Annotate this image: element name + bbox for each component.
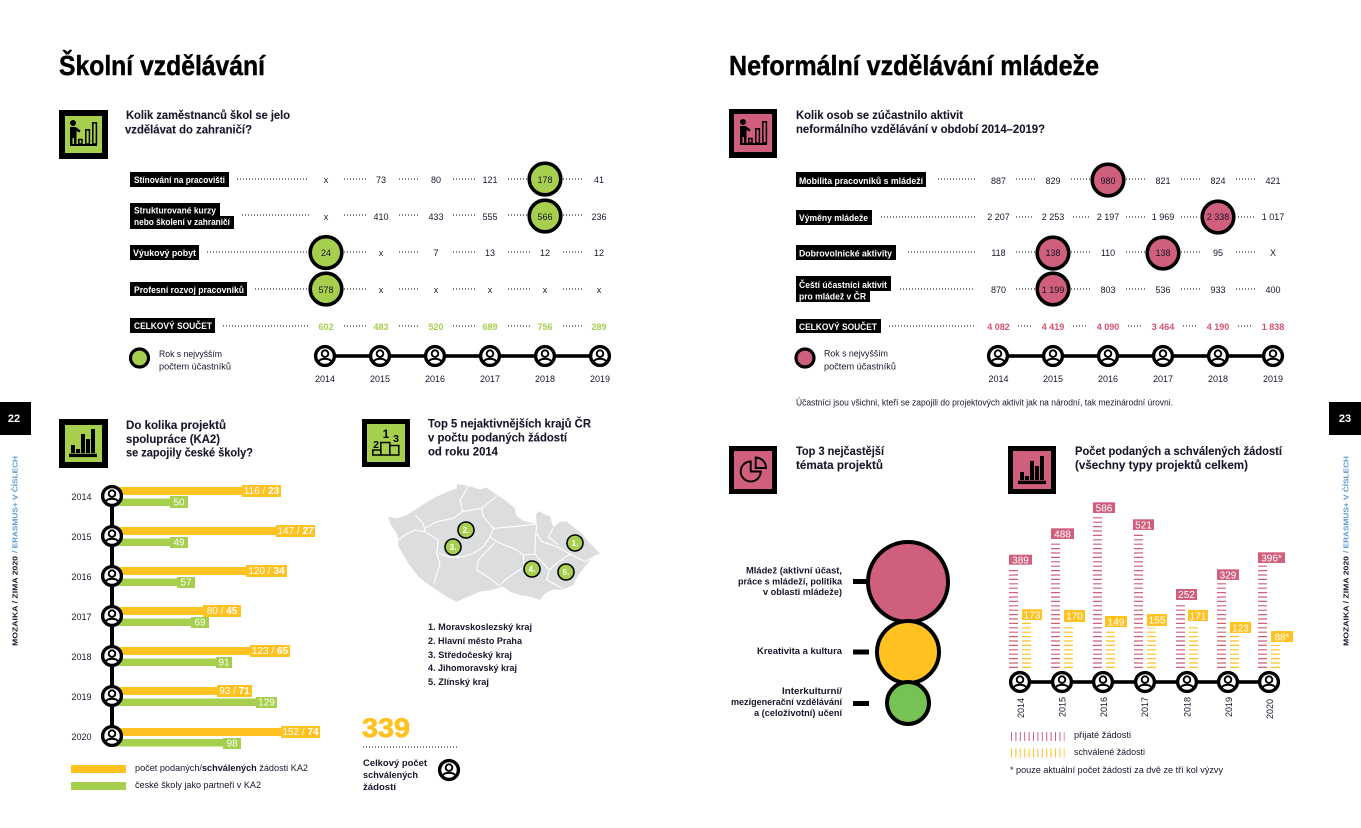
table values <box>987 176 1284 295</box>
yellow value tags: 88* <box>1274 632 1290 644</box>
row labels: nebo školení v zahraničí <box>134 217 230 227</box>
bar value labels: 123 / 65 <box>252 646 289 657</box>
map of Czech regions <box>388 484 600 602</box>
timeline 2014-2019: 2018 <box>535 374 555 384</box>
page number tab 23 <box>1329 402 1361 435</box>
legend: highest year: Rok s nejvyšším <box>824 348 888 358</box>
row labels: Výměny mládeže <box>799 213 868 223</box>
table values: 236 <box>591 212 607 222</box>
totals pink: 3 464 <box>1152 322 1174 332</box>
year labels: 2019 <box>71 692 92 702</box>
table values: 73 <box>376 175 386 185</box>
yellow value tags: 173 <box>1024 610 1041 622</box>
heading: KA2 question: spolupráce (KA2) <box>126 432 220 446</box>
table values <box>318 175 607 295</box>
map marker numbers <box>450 526 578 577</box>
table values: X <box>1270 248 1276 258</box>
table values: 110 <box>1101 248 1115 258</box>
table values: 121 <box>482 175 498 185</box>
map marker numbers: 4. <box>529 565 535 574</box>
table values: x <box>434 285 439 295</box>
bars <box>112 485 320 749</box>
timeline 2014-2019: 2014 <box>988 374 1009 384</box>
year labels: 2016 <box>71 572 92 582</box>
timeline 2014-2019: 2019 <box>1263 374 1283 384</box>
row labels: Stínování na pracovišti <box>134 175 225 185</box>
topic labels: Interkulturní/ <box>782 686 843 696</box>
table values: 421 <box>1265 176 1281 186</box>
region list: 1. Moravskoslezský kraj <box>428 622 532 632</box>
totals green <box>318 322 607 332</box>
table values: 887 <box>991 176 1006 186</box>
table values: 80 <box>431 175 441 185</box>
table values: 536 <box>1155 285 1171 295</box>
rotated year labels <box>1016 697 1275 719</box>
table values: 2 253 <box>1042 212 1064 222</box>
page number tab 22 <box>0 402 31 435</box>
vertical timeline with icons <box>103 487 121 745</box>
heading: KA2 question <box>126 418 253 460</box>
table values: 410 <box>373 212 389 222</box>
highlight circles <box>310 163 561 305</box>
row labels: CELKOVÝ SOUČET <box>134 320 212 331</box>
icon: bar chart pink <box>1008 446 1056 494</box>
pink value tags: 252 <box>1178 590 1195 601</box>
legend submitted / approved: schválené žádosti <box>1074 747 1145 757</box>
panel: KA2 projects <box>59 418 320 790</box>
icon: podium green: 2 <box>373 439 379 451</box>
panel: school staff table <box>59 108 610 384</box>
row labels: CELKOVÝ SOUČET <box>799 321 877 332</box>
stat 339 <box>362 713 459 792</box>
table values: 1 017 <box>1262 212 1284 222</box>
rotated year labels: 2016 <box>1099 697 1109 717</box>
table values: 803 <box>1100 285 1116 295</box>
table values: 13 <box>485 248 495 258</box>
rotated year labels: 2019 <box>1224 697 1234 717</box>
row labels: Strukturované kurzy <box>134 206 216 216</box>
heading: KA2 question: se zapojily české školy? <box>126 446 253 460</box>
icon: podium green <box>362 419 410 467</box>
heading: top 5: od roku 2014 <box>428 444 498 458</box>
yellow value tags: 149 <box>1108 618 1125 628</box>
bar value labels: 129 <box>258 698 275 708</box>
topic labels: práce s mládeží, politika <box>738 576 843 586</box>
icon: bar chart green <box>59 419 108 468</box>
table values: 578 <box>318 285 334 295</box>
map marker numbers: 1. <box>572 539 578 548</box>
row labels <box>796 172 926 333</box>
totals pink: 4 082 <box>987 322 1010 332</box>
table values: 824 <box>1210 176 1226 186</box>
map marker numbers: 5. <box>563 568 569 577</box>
totals pink: 4 419 <box>1042 322 1064 332</box>
panel: top 3 topics <box>729 444 948 724</box>
year labels: 2014 <box>71 492 92 502</box>
timeline 2014-2019: 2017 <box>1153 374 1173 384</box>
table values: x <box>324 212 329 222</box>
yellow value tags: 123 <box>1232 624 1249 634</box>
row labels: Mobilita pracovníků s mládeží <box>799 176 923 186</box>
year labels <box>71 492 92 742</box>
heading: staff question <box>125 108 290 136</box>
legend KA2: počet podaných/schválených žádosti KA2 <box>135 763 308 773</box>
table values: x <box>543 285 548 295</box>
table values: 870 <box>991 285 1006 295</box>
timeline 2014-2019: 2015 <box>370 374 390 384</box>
pink value tags: 396* <box>1261 554 1282 564</box>
year labels: 2020 <box>71 732 92 742</box>
heading: participants question: Kolik osob se zúčastnilo aktivit <box>796 108 963 122</box>
table values: 24 <box>321 248 331 258</box>
table values: 433 <box>428 212 444 222</box>
timeline 2014-2019: 2015 <box>1043 374 1063 384</box>
vertical running head left <box>10 456 20 646</box>
totals pink: 4 190 <box>1207 322 1229 332</box>
table values: 138 <box>1045 248 1061 258</box>
table values: x <box>597 285 602 295</box>
timeline 2014-2019: 2019 <box>590 374 610 384</box>
stat 339: schválených <box>363 770 418 780</box>
region list: 4. Jihomoravský kraj <box>428 663 517 673</box>
striped bars submitted <box>1014 516 1262 668</box>
table values: 933 <box>1210 285 1226 295</box>
bar value labels: 69 <box>194 618 206 628</box>
legend KA2 <box>71 763 308 790</box>
rotated year labels: 2020 <box>1265 699 1275 719</box>
vertical running head right: MOZAIKA / ZIMA 2020 <box>1344 556 1350 646</box>
table values: 1 199 <box>1042 285 1064 295</box>
year labels: 2015 <box>71 532 92 542</box>
legend: highest year: počtem účastníků <box>824 362 896 372</box>
totals green: 602 <box>318 322 334 332</box>
footnote: * pouze aktuální počet žádostí za dvě ze tří kol výzvy <box>1010 765 1224 775</box>
table values: x <box>324 175 329 185</box>
legend: highest year: Rok s nejvyšším <box>159 349 222 359</box>
icon: person with bars pink <box>729 109 777 158</box>
table values: 41 <box>594 175 604 185</box>
yellow value tags <box>1022 609 1293 644</box>
bar value labels: 120 / 34 <box>248 566 285 577</box>
bar value labels: 116 / 23 <box>244 486 280 497</box>
table values: 12 <box>594 248 604 258</box>
legend: highest year <box>130 349 231 372</box>
yellow value tags: 155 <box>1149 616 1166 626</box>
rotated year labels: 2014 <box>1016 698 1026 718</box>
table values: 7 <box>433 248 439 258</box>
row labels: Dobrovolnické aktivity <box>799 248 892 258</box>
table values: 2 197 <box>1097 212 1119 222</box>
heading: KA2 question: Do kolika projektů <box>126 418 226 432</box>
page title: school education: Školní vzdělávání <box>59 49 266 81</box>
year labels: 2018 <box>71 652 92 662</box>
table values: 821 <box>1155 176 1171 186</box>
row labels: Výukový pobyt <box>133 248 196 258</box>
topic labels: mezigenerační vzdělávání <box>731 697 842 707</box>
timeline 2014-2019 <box>988 347 1283 384</box>
bar value labels: 91 <box>218 658 230 668</box>
note under table: Účastníci jsou všichni, kteří se zapojili do projektových aktivit jak na národní, tak mezinárodní úrovni. <box>796 398 1173 408</box>
connector lines <box>853 579 869 706</box>
row labels: pro mládež v ČR <box>799 290 866 302</box>
topic labels: a (celoživotní) učení <box>754 708 843 718</box>
topic labels: Kreativita a kultura <box>757 646 843 656</box>
table values: 1 969 <box>1152 212 1174 222</box>
panel: participants table <box>729 108 1284 408</box>
year labels: 2017 <box>71 612 92 622</box>
legend: highest year <box>796 348 896 372</box>
legend submitted / approved <box>1011 730 1145 757</box>
stat 339: žádostí <box>363 782 397 792</box>
totals green: 689 <box>482 322 498 332</box>
bar value labels <box>173 486 319 750</box>
page number tab 23: 23 <box>1339 413 1351 425</box>
pink value tags: 521 <box>1135 520 1152 532</box>
table values: x <box>488 285 493 295</box>
topic labels: Mládež (aktivní účast, <box>746 566 842 576</box>
horizontal timeline with icons <box>1011 673 1278 691</box>
bar value labels: 152 / 74 <box>282 727 319 738</box>
bar value labels: 57 <box>180 578 192 588</box>
heading: top 3: Top 3 nejčastější <box>796 444 885 458</box>
timeline 2014-2019: 2017 <box>480 374 500 384</box>
timeline 2014-2019: 2014 <box>315 374 335 384</box>
timeline 2014-2019: 2016 <box>425 374 445 384</box>
table values: 980 <box>1100 176 1116 186</box>
region list: 2. Hlavní město Praha <box>428 636 523 646</box>
bar value labels: 49 <box>173 538 185 548</box>
legend KA2: české školy jako partneři v KA2 <box>135 780 261 790</box>
rotated year labels: 2017 <box>1140 697 1150 717</box>
icon: podium green: 3 <box>393 433 399 445</box>
table values: 12 <box>540 248 550 258</box>
vertical running head right: / ERASMUS+ V ČÍSLECH <box>1342 456 1350 553</box>
timeline 2014-2019: 2018 <box>1208 374 1228 384</box>
row labels <box>130 172 247 333</box>
table values: 118 <box>991 248 1006 258</box>
legend: highest year: počtem účastníků <box>159 362 231 372</box>
yellow value tags: 170 <box>1066 612 1083 622</box>
page title: non-formal youth education: Neformální vzdělávání mládeže <box>729 50 1099 81</box>
table values: 555 <box>482 212 498 222</box>
map marker numbers: 2. <box>463 526 469 535</box>
table values: 2 338 <box>1207 212 1229 222</box>
heading: participants question <box>796 108 1045 136</box>
striped bars approved <box>1026 623 1276 668</box>
highlight circles <box>1037 164 1234 305</box>
heading: staff question: vzdělávat do zahraničí? <box>125 122 252 136</box>
totals pink <box>987 322 1284 332</box>
heading: applications <box>1075 444 1283 472</box>
table values: 829 <box>1045 176 1061 186</box>
bar value labels: 98 <box>226 738 238 750</box>
bar value labels: 147 / 27 <box>277 526 314 537</box>
heading: applications: Počet podaných a schválených žádostí <box>1075 444 1283 458</box>
heading: applications: (všechny typy projektů celkem) <box>1075 458 1248 472</box>
stat 339: Celkový počet <box>363 758 427 768</box>
topic labels: v oblasti mládeže) <box>763 587 842 597</box>
region list: 5. Zlínský kraj <box>428 677 489 687</box>
heading: top 3: témata projektů <box>796 458 883 472</box>
table values: 95 <box>1213 248 1223 258</box>
rotated year labels: 2015 <box>1058 697 1068 717</box>
table values: 178 <box>537 175 553 185</box>
vertical running head right <box>1342 456 1350 646</box>
heading: top 3 <box>796 444 885 472</box>
pink value tags: 389 <box>1012 556 1029 566</box>
heading: top 5: v počtu podaných žádostí <box>428 430 568 444</box>
vertical running head left: MOZAIKA / ZIMA 2020 <box>12 556 20 646</box>
timeline 2014-2019 <box>315 347 610 384</box>
stat 339: 339 <box>362 713 410 743</box>
pink value tags <box>1009 502 1285 601</box>
table values: 138 <box>1155 248 1171 258</box>
row labels: Profesní rozvoj pracovníků <box>134 285 244 295</box>
region list <box>428 622 532 687</box>
map marker numbers: 3. <box>450 543 456 552</box>
table values: x <box>379 248 384 258</box>
topic labels <box>731 566 843 718</box>
bar value labels: 93 / 71 <box>219 686 250 697</box>
map markers <box>445 522 583 580</box>
heading: top 5: Top 5 nejaktivnějších krajů ČR <box>428 416 591 430</box>
region list: 3. Středočeský kraj <box>428 650 512 660</box>
totals pink: 4 090 <box>1097 322 1119 332</box>
table values: 400 <box>1265 285 1281 295</box>
icon: podium green: 1 <box>383 429 390 441</box>
table values: x <box>379 285 384 295</box>
pink value tags: 586 <box>1096 504 1113 514</box>
bar value labels: 50 <box>173 498 185 508</box>
table values: 2 207 <box>987 212 1010 222</box>
totals green: 520 <box>428 322 444 332</box>
icon: person with bars green <box>59 110 108 159</box>
rotated year labels: 2018 <box>1182 697 1192 717</box>
bar value labels: 80 / 45 <box>207 606 238 617</box>
totals pink: 1 838 <box>1262 322 1284 332</box>
icon: pie chart pink <box>729 446 777 494</box>
timeline 2014-2019: 2016 <box>1098 374 1118 384</box>
totals green: 756 <box>537 322 553 332</box>
legend submitted / approved: přijaté žádosti <box>1074 730 1131 740</box>
heading: participants question: neformálního vzdělávání v období 2014–2019? <box>796 122 1045 136</box>
heading: top 5 <box>428 416 591 458</box>
totals green: 483 <box>373 322 389 332</box>
panel: top 5 regions <box>362 416 600 792</box>
panel: applications chart <box>1008 444 1293 775</box>
page number tab 22: 22 <box>8 413 20 425</box>
table values: 566 <box>537 212 553 222</box>
heading: staff question: Kolik zaměstnanců škol se jelo <box>126 108 290 122</box>
totals green: 289 <box>591 322 607 332</box>
pink value tags: 329 <box>1220 570 1237 582</box>
pink value tags: 488 <box>1054 530 1071 540</box>
yellow value tags: 171 <box>1190 612 1207 622</box>
circles <box>868 542 948 724</box>
row labels: Čeští účastníci aktivit <box>799 279 887 290</box>
vertical running head left: / ERASMUS+ V ČÍSLECH <box>10 456 20 553</box>
